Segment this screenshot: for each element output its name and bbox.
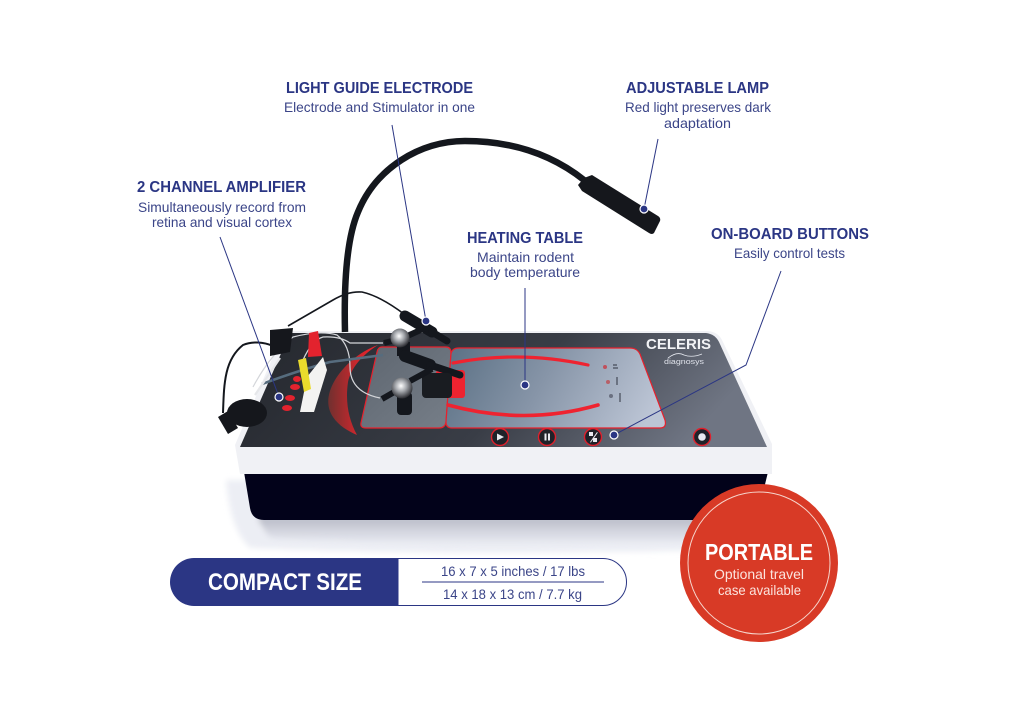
callout: adjustable lamp: adaptation <box>664 115 731 131</box>
amplifier knob <box>218 328 293 434</box>
metric size: 14 x 18 x 13 cm / 7.7 kg <box>443 586 582 602</box>
callout: 2 channel amplifier: 2 CHANNEL AMPLIFIER <box>137 179 306 196</box>
callout: 2 channel amplifier: Simultaneously record from <box>138 199 306 215</box>
callout: light guide electrode: Electrode and Stimulator in one <box>284 99 475 115</box>
callout: heating table: HEATING TABLE <box>467 230 583 247</box>
callout: adjustable lamp: Red light preserves dark <box>625 99 772 115</box>
size values outline <box>398 558 626 606</box>
amplifier connectors <box>282 331 327 412</box>
cables <box>223 292 404 413</box>
callout: light guide electrode: LIGHT GUIDE ELECTRODE <box>286 80 473 97</box>
callout: heating table: Maintain rodent <box>477 249 574 265</box>
device: Celeris console <box>218 141 772 553</box>
device shadow <box>258 516 740 543</box>
CELERIS logo: CELERIS <box>646 336 711 353</box>
device black base <box>244 472 768 520</box>
portable badge: PORTABLE <box>705 539 813 565</box>
CELERIS logo: diagnosys <box>664 359 705 366</box>
callout: adjustable lamp <box>625 80 772 213</box>
compact size heading <box>170 558 398 606</box>
red crescent <box>328 345 378 435</box>
callout: on-board buttons: Easily control tests <box>734 245 845 261</box>
red heating arcs <box>448 357 598 416</box>
compact size bar: COMPACT SIZE <box>208 569 362 596</box>
portable badge <box>680 484 838 642</box>
gooseneck lamp arm <box>345 141 584 332</box>
imperial size: 16 x 7 x 5 inches / 17 lbs <box>441 563 585 579</box>
portable badge: case available <box>718 582 801 598</box>
device top panel <box>240 333 767 447</box>
heating table indicators <box>603 365 620 402</box>
CELERIS logo <box>646 336 711 366</box>
callout: heating table: body temperature <box>470 264 580 280</box>
button glyphs <box>497 432 706 443</box>
lamp head <box>578 175 660 234</box>
compact size bar <box>170 558 626 606</box>
stimulator posts and light guide <box>382 316 460 415</box>
heating table <box>446 348 665 428</box>
callout: on-board buttons <box>610 226 869 439</box>
callout: adjustable lamp: ADJUSTABLE LAMP <box>626 80 769 97</box>
device shadow halo <box>226 480 720 553</box>
red pad <box>436 370 465 398</box>
device white band <box>235 331 772 474</box>
left platform <box>361 347 451 428</box>
portable badge: Optional travel <box>714 566 804 582</box>
callout: on-board buttons: ON-BOARD BUTTONS <box>711 226 869 243</box>
callout: 2 channel amplifier <box>137 179 306 401</box>
callout: 2 channel amplifier: retina and visual cortex <box>152 214 292 230</box>
callout: light guide electrode <box>284 80 475 325</box>
callout: heating table <box>467 230 583 389</box>
board buttons <box>492 428 710 446</box>
